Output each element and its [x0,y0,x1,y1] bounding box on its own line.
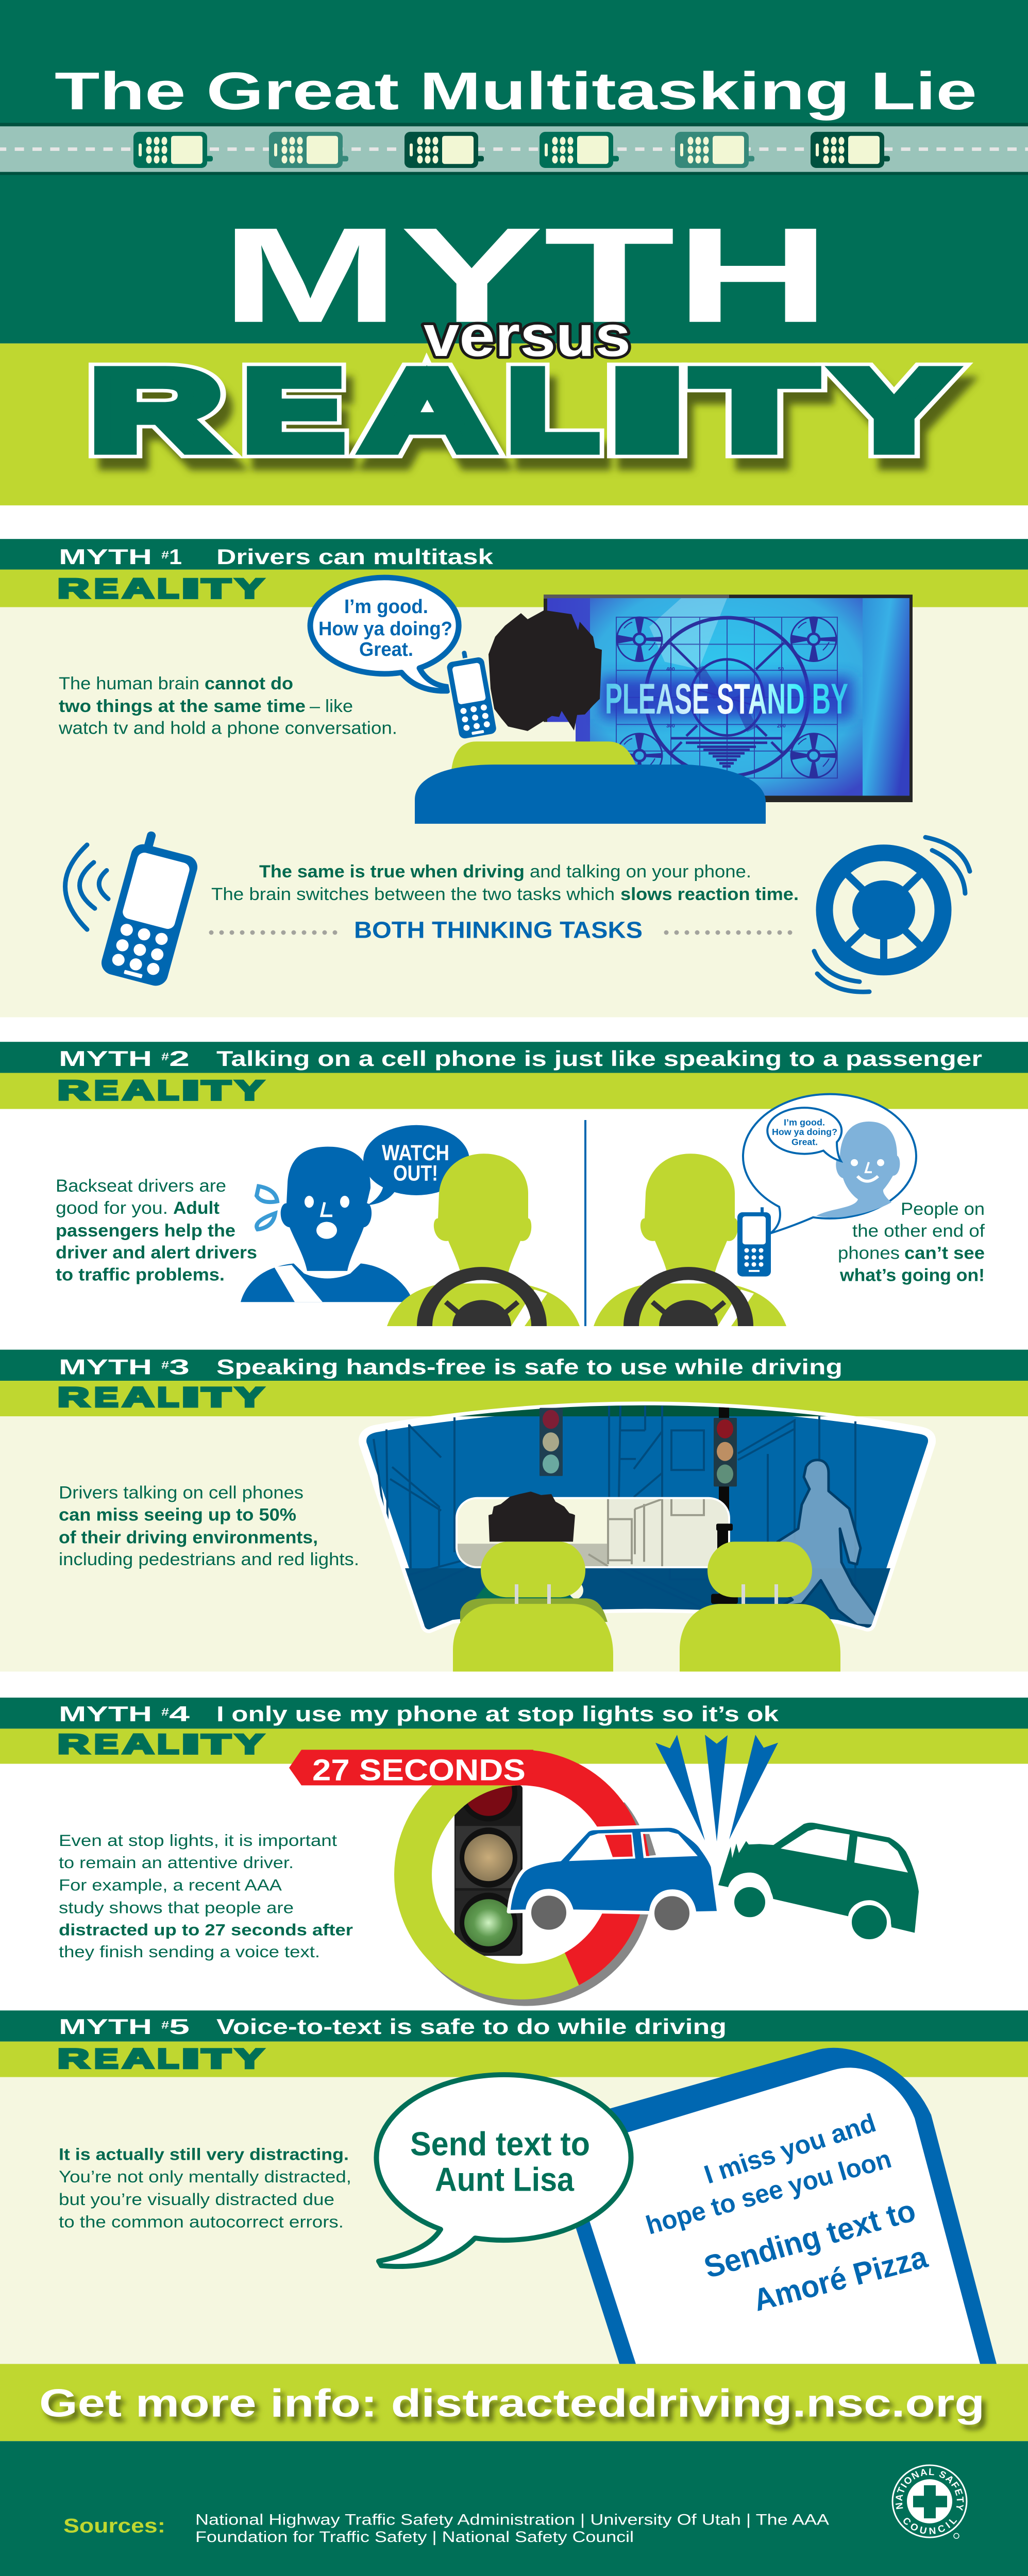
heading: reality 5: A [123,2043,154,2074]
text block: backseat drivers: good for you. [56,1198,168,1218]
text block: driving and talking: slows reaction time. [620,885,799,904]
text block: people on the other end: People on [901,1199,985,1219]
heading: myth 1: # [161,548,169,561]
icon: small phone [444,648,498,740]
icon: television with test pattern [544,595,913,802]
heading: reality 3: L [157,1382,179,1412]
heading: myth 1: 1 [169,545,182,569]
heading: reality 1: Y [235,573,263,604]
icon: large ringing phone [65,828,204,989]
panel: myth 5 [0,2010,1028,2364]
speech bubble: watch out: WATCH [382,1141,449,1165]
text: message on phone: hope to see you loon [643,2144,895,2240]
heading: reality 3: R [58,1382,89,1412]
text block: backseat drivers: driver and alert drivers [56,1243,257,1262]
heading: REALITY with shadow: I [609,346,685,474]
heading: REALITY with shadow: L [507,347,598,474]
text block: driving and talking: The same is true when driving [259,862,525,882]
icon: television with test pattern: 400 [666,667,675,672]
text block: drivers can miss: of their driving environments, [59,1528,318,1547]
heading: REALITY with shadow [90,346,961,487]
heading: myth 3 [59,1355,842,1379]
heading: myth 5: Voice-to-text is safe to do while driving [216,2015,727,2039]
speech bubble: send text: Send text to [410,2125,590,2163]
heading: REALITY with shadow: T [694,347,815,474]
text block: backseat drivers: Adult [173,1198,220,1218]
label: sources: Sources: [63,2515,165,2537]
heading: REALITY with shadow: T [694,347,815,474]
illustration: viewer from behind [415,610,766,824]
heading: reality 1: A [123,573,154,604]
heading: REALITY with shadow: E [243,346,344,474]
chart: 27 second timer ring [289,1750,653,2006]
text block: stop lights [59,1832,353,1961]
text block: still distracting: You’re not only mentally distracted, [59,2167,351,2186]
speech bubble: small: I’m good. [784,1117,825,1128]
heading: REALITY with shadow: E [251,359,352,487]
heading: reality 4: Y [235,1729,263,1759]
banner: 27 seconds: 27 SECONDS [312,1753,526,1787]
heading: reality 5: T [202,2043,231,2074]
heading: reality 4: L [157,1729,179,1759]
icon: impact spikes [655,1735,778,1841]
text block: still distracting [59,2145,351,2231]
illustration: passenger seat left [453,1541,613,1671]
speech bubble: watch out: OUT! [393,1161,438,1186]
icon: green car [718,1823,919,1941]
text: message on phone [643,2108,932,2318]
heading: reality 5: I [181,2043,200,2074]
text block: stop lights: distracted up to 27 seconds after [59,1921,353,1939]
text block: human brain: watch tv and hold a phone conversation. [58,719,397,738]
title: The Great Multitasking Lie [55,61,977,121]
illustration: other person in thought bubble [743,1094,916,1233]
heading: reality 4: E [94,1730,118,1760]
icon: phone 5 [675,132,754,168]
text block: human brain [58,674,397,738]
text block: human brain: – like [310,697,353,716]
heading: REALITY with shadow: R [90,346,223,474]
icon: steering wheel [814,837,970,992]
heading: reality 1: T [202,573,231,604]
text block: people on the other end: what’s going on! [839,1266,985,1285]
heading: reality 5 [58,2043,263,2074]
icon: traffic light left [540,1408,563,1476]
text block: people on the other end: the other end of [852,1222,985,1241]
heading: reality 4: A [123,1729,154,1759]
heading: myth 4: MYTH [59,1702,152,1726]
icon: traffic light [454,1786,523,1956]
heading: REALITY with shadow: A [370,360,501,487]
panel: get more info: Get more info: distracteddriving.nsc.org [43,2386,989,2430]
logo: national safety council: COUNCIL [903,2518,957,2535]
text block: drivers can miss [59,1483,359,1569]
heading: REALITY with shadow: E [243,346,344,474]
heading: myth 5 [59,2015,727,2039]
illustration: left driver [387,1154,580,1326]
heading: reality 1: E [94,573,118,604]
text block: stop lights: For example, a recent AAA [59,1876,282,1894]
heading: reality 5: Y [235,2043,263,2074]
text block: still distracting: but you’re visually distracted due [59,2190,334,2209]
text block: still distracting: It is actually still very distracting. [59,2145,349,2163]
heading: REALITY with shadow: L [507,347,598,474]
heading: reality 4: R [58,1729,89,1759]
heading: reality 2: E [94,1076,118,1106]
icon: phone 2 [269,132,348,168]
heading: myth 3: MYTH [59,1355,152,1379]
panel: myth 2 [0,1042,1028,1326]
heading: REALITY with shadow: A [362,347,493,474]
icon: television with test pattern: 300 [666,723,675,729]
heading: REALITY with shadow: R [98,360,231,487]
text block: people on the other end: can’t see [904,1244,985,1263]
header panel: title and myth versus reality [0,0,1028,505]
icon: driver's phone [737,1207,771,1277]
speech bubble: I'm good [310,578,459,691]
text block: source list: Foundation for Traffic Safety | National Safety Council [195,2529,634,2546]
illustration: passenger seat right [680,1541,840,1671]
heading: myth 4 [59,1702,779,1726]
heading: REALITY with shadow: I [617,360,694,487]
speech bubble: small: How ya doing? [772,1127,837,1137]
heading: reality 2: T [202,1075,231,1106]
text: message on phone: I miss you and [701,2108,880,2189]
heading: myth 3: 3 [169,1355,190,1379]
text: please stand by: PLEASE STAND BY [605,674,848,723]
icon: phone 4 [540,132,619,168]
heading: reality 2: I [181,1075,200,1106]
text block: people on the other end [838,1199,985,1285]
text block: driving and talking [211,862,799,904]
heading: myth 4: I only use my phone at stop lights so it’s ok [216,1702,779,1726]
heading: MYTH: MYTH [221,200,831,351]
text block: stop lights: Even at stop lights, it is important [59,1832,337,1850]
heading: myth 4: 4 [169,1702,190,1726]
heading: reality 1: L [157,573,179,604]
text block: driving and talking: and talking on your phone. [530,862,751,882]
text block: source list: National Highway Traffic Safety Administration | University Of Utah | The AAA [195,2512,829,2529]
icon: phone 6 [811,132,890,168]
panel: footer [0,2441,1028,2576]
figure: pedestrian [776,1460,876,1626]
text block: people on the other end: phones [838,1244,900,1263]
text block: human brain: two things at the same time [59,697,306,716]
logo: national safety council [891,2465,968,2539]
heading: myth 5: MYTH [59,2015,152,2039]
text block: stop lights: to remain an attentive driver. [59,1853,294,1872]
heading: reality 3: T [202,1382,231,1413]
icon: television with test pattern: 50 [778,667,784,672]
heading: REALITY with shadow: I [609,346,685,474]
road with phone cars [0,123,1028,175]
text: message on phone: Sending text to [700,2193,919,2284]
heading: myth 2: # [161,1050,169,1063]
panel: myth 1 [0,539,1028,1018]
panel: get more info [0,2364,1028,2441]
text block: still distracting: to the common autocorrect errors. [59,2213,344,2231]
text block: drivers can miss: including pedestrians and red lights. [59,1550,359,1569]
text block: backseat drivers: Backseat drivers are [56,1177,226,1196]
text block: stop lights: they finish sending a voice text. [59,1943,320,1961]
icon: large phone with text messages [544,2048,997,2364]
heading: myth 5: # [161,2019,169,2031]
text block: backseat drivers [56,1177,257,1284]
illustration: alert passenger [241,1147,413,1302]
heading: myth 1: Drivers can multitask [216,545,494,569]
heading: REALITY with shadow: Y [844,360,961,487]
icon: phone 3 [405,132,484,168]
heading: reality 2 [58,1075,263,1106]
heading: myth 3: Speaking hands-free is safe to use while driving [216,1355,842,1379]
illustration: windshield view [356,1394,938,1671]
logo: national safety council: NATIONAL SAFETY [896,2468,964,2511]
heading: myth 2: Talking on a cell phone is just like speaking to a passenger [216,1046,982,1071]
heading: reality 3: E [94,1382,118,1413]
heading: myth 5: 5 [169,2015,190,2039]
icon: traffic light right [714,1418,737,1486]
heading: versus: versus [424,303,631,369]
heading: reality 2: A [123,1075,154,1106]
speech bubble: I'm good: Great. [359,638,413,660]
heading: REALITY with shadow: Y [835,347,953,474]
heading: reality 1 [58,573,263,604]
heading: reality 5: E [94,2044,118,2074]
heading: reality 3: I [181,1382,200,1413]
heading: myth 2 [59,1046,982,1071]
speech bubble: I'm good: I’m good. [344,596,428,618]
text block: drivers can miss: can miss seeing up to 50% [59,1505,296,1524]
heading: reality 3 [58,1382,263,1413]
heading: myth 4: # [161,1705,169,1718]
panel: myth 4 [0,1698,1028,2006]
heading: myth 1 [59,545,494,569]
speech bubble: watch out [363,1125,469,1205]
heading: REALITY with shadow: T [702,360,823,487]
icon: television with test pattern: 200 [777,723,786,729]
panel: myth 3 [0,1350,1028,2576]
text block: stop lights: study shows that people are [59,1899,294,1917]
heading: reality 2: Y [235,1075,263,1106]
icon: sweat drops [257,1186,277,1229]
heading: REALITY with shadow: Y [835,347,953,474]
speech bubble: small [767,1108,841,1161]
speech bubble: send text: Aunt Lisa [435,2161,575,2198]
call to action text: Get more info: distracteddriving.nsc.org [39,2381,985,2425]
text block: drivers can miss: Drivers talking on cell phones [59,1483,304,1503]
heading: myth 1: MYTH [59,545,152,569]
heading: reality 1: R [58,573,89,604]
callout: both thinking tasks: BOTH THINKING TASKS [354,917,643,943]
heading: REALITY with shadow: A [362,347,493,474]
heading: REALITY with shadow: R [90,346,223,474]
heading: REALITY with shadow: L [515,360,606,487]
heading: reality 3: A [123,1382,154,1413]
heading: reality 5: L [157,2043,179,2074]
heading: myth 2: 2 [169,1046,190,1071]
heading: myth 2: MYTH [59,1046,152,1071]
speech bubble: send text [376,2075,631,2266]
divider [584,1120,586,1326]
icon: pole [719,1407,729,1604]
icon: blue car [509,1826,719,1932]
heading: myth 3: # [161,1359,169,1371]
text: message on phone: Amoré Pizza [750,2239,932,2318]
icon: phone 1 [133,132,213,168]
speech bubble: small: Great. [791,1137,818,1147]
heading: reality 4: T [202,1728,231,1759]
heading: reality 1: I [181,573,200,604]
heading: reality 2: R [58,1075,89,1106]
heading: reality 4 [58,1728,263,1760]
text block: source list [195,2512,829,2546]
text block: human brain: cannot do [205,674,293,693]
text block: driving and talking: The brain switches between the two tasks which [211,885,615,904]
heading: reality 5: R [58,2043,89,2074]
text block: backseat drivers: passengers help the [56,1221,235,1241]
text block: backseat drivers: to traffic problems. [56,1265,225,1284]
icon: rearview mirror [456,1492,733,1568]
heading: reality 2: L [157,1075,179,1106]
illustration: right driver [594,1154,786,1326]
heading: reality 3: Y [235,1382,263,1413]
heading: reality 4: I [181,1729,200,1759]
speech bubble: I'm good: How ya doing? [318,618,452,640]
text block: human brain: The human brain [59,674,199,693]
